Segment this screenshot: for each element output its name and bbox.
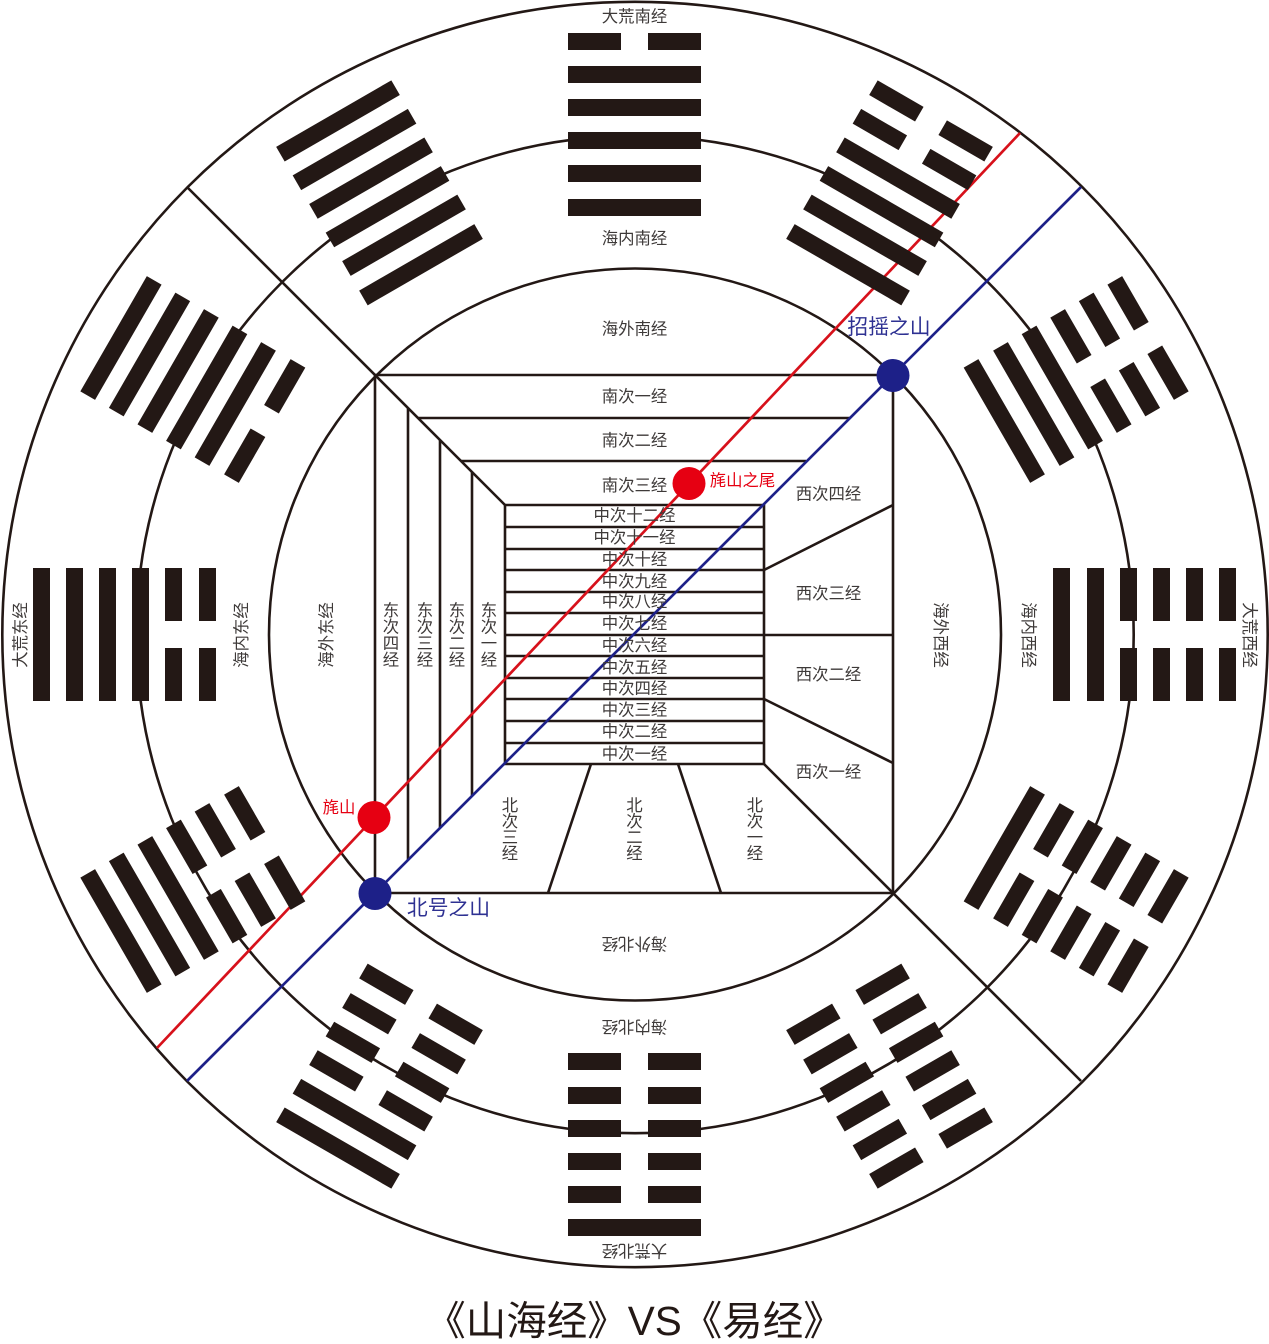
hexagram: 120 degrees xyxy=(964,786,1189,993)
north labels vertical 北次 xyxy=(502,797,763,863)
east labels rotated: 海内东经 xyxy=(233,602,251,668)
central labels 中次: 中次十二经 xyxy=(594,507,675,525)
central labels 中次: 中次七经 xyxy=(602,615,667,633)
hexagram: 150 degrees xyxy=(786,964,993,1189)
north labels upside down: 海内北经 xyxy=(602,1017,667,1035)
marker: 北号之山 xyxy=(358,877,490,920)
north labels upside down: 大荒北经 xyxy=(602,1241,667,1259)
east labels vertical 东次: 二 xyxy=(449,635,465,653)
west labels 西次: 西次一经 xyxy=(796,764,861,782)
east labels rotated: 海外东经 xyxy=(318,602,336,668)
east labels rotated xyxy=(12,602,336,668)
central labels 中次 xyxy=(594,507,675,764)
north labels vertical 北次: 经 xyxy=(747,845,763,863)
hexagram: left xyxy=(33,568,216,701)
hexagram: 60 degrees xyxy=(964,276,1189,483)
east labels vertical 东次 xyxy=(383,602,497,670)
hexagram: right xyxy=(1053,568,1236,701)
south labels: 海内南经 xyxy=(602,230,667,248)
north labels vertical 北次: 经 xyxy=(502,845,518,863)
north labels vertical 北次: 次 xyxy=(502,813,518,831)
central labels 中次: 中次九经 xyxy=(602,573,667,591)
east labels vertical 东次: 经 xyxy=(417,652,433,670)
north labels upside down: 海外北经 xyxy=(602,934,667,952)
blue line: 招摇之山 to 北号之山 alignment xyxy=(187,187,1081,1081)
hexagram: 210 degrees xyxy=(276,964,483,1189)
east labels vertical 东次: 次 xyxy=(481,618,497,636)
west labels 西次: 西次三经 xyxy=(796,585,861,603)
central labels 中次: 中次三经 xyxy=(602,702,667,720)
central labels 中次: 中次十一经 xyxy=(594,529,675,547)
east labels vertical 东次: 东 xyxy=(417,602,433,620)
marker: 招摇之山: 招摇之山 xyxy=(847,316,931,339)
east labels vertical 东次: 经 xyxy=(383,652,399,670)
north labels vertical 北次: 北 xyxy=(502,797,518,815)
north labels vertical 北次: 次 xyxy=(626,813,643,831)
east labels vertical 东次: 东 xyxy=(481,602,497,620)
east labels vertical 东次: 一 xyxy=(481,635,497,653)
central square diagram lines xyxy=(187,187,1081,1081)
north labels upside down xyxy=(602,934,667,1259)
south labels xyxy=(602,8,667,495)
hexagram: 330 degrees xyxy=(276,80,483,305)
south labels: 大荒南经 xyxy=(602,8,667,26)
marker: 旄山 xyxy=(323,799,390,834)
red line: 旄山 alignment xyxy=(157,133,1020,1048)
west labels rotated xyxy=(931,602,1258,668)
north labels vertical 北次: 北 xyxy=(747,797,763,815)
central labels 中次: 中次六经 xyxy=(602,637,667,655)
east labels vertical 东次: 经 xyxy=(481,652,497,670)
central labels 中次: 中次八经 xyxy=(602,593,667,611)
north labels vertical 北次: 三 xyxy=(502,829,518,847)
marker: 旄山: 旄山 xyxy=(323,799,355,817)
central labels 中次: 中次十经 xyxy=(602,551,667,569)
marker: 旄山之尾: 旄山之尾 xyxy=(710,472,775,490)
north labels vertical 北次: 一 xyxy=(747,829,763,847)
east labels vertical 东次: 经 xyxy=(449,652,465,670)
hexagram: 30 degrees xyxy=(786,80,993,305)
east labels vertical 东次: 次 xyxy=(383,618,399,636)
north labels vertical 北次: 经 xyxy=(626,845,643,863)
marker: 旄山之尾 xyxy=(672,467,775,500)
west labels 西次 xyxy=(796,486,861,782)
title: 《山海经》VS《易经》 xyxy=(425,1298,844,1344)
north labels vertical 北次: 二 xyxy=(626,829,643,847)
central labels 中次: 中次五经 xyxy=(602,659,667,677)
south labels: 海外南经 xyxy=(602,320,667,338)
hexagram: 300 degrees xyxy=(80,276,305,483)
east labels rotated: 大荒东经 xyxy=(12,602,30,668)
west labels rotated: 海外西经 xyxy=(931,602,949,668)
south labels: 南次三经 xyxy=(602,477,667,495)
west labels rotated: 海内西经 xyxy=(1019,602,1037,668)
south labels: 南次二经 xyxy=(602,432,667,450)
north labels vertical 北次: 北 xyxy=(626,797,643,815)
east labels vertical 东次: 三 xyxy=(417,635,433,653)
east labels vertical 东次: 东 xyxy=(449,602,465,620)
west labels 西次: 西次四经 xyxy=(796,486,861,504)
north labels vertical 北次: 次 xyxy=(747,813,763,831)
hexagram: top xyxy=(568,33,701,216)
west labels rotated: 大荒西经 xyxy=(1240,602,1258,668)
west labels 西次: 西次二经 xyxy=(796,666,861,684)
marker: 招摇之山 xyxy=(847,316,931,392)
east labels vertical 东次: 四 xyxy=(383,635,399,653)
hexagram: 240 degrees xyxy=(80,786,305,993)
east labels vertical 东次: 次 xyxy=(449,618,465,636)
south labels: 南次一经 xyxy=(602,388,667,406)
marker: 北号之山: 北号之山 xyxy=(407,897,490,920)
central labels 中次: 中次二经 xyxy=(602,723,667,741)
hexagram: bottom xyxy=(568,1053,701,1236)
central labels 中次: 中次四经 xyxy=(602,680,667,698)
east labels vertical 东次: 次 xyxy=(417,618,433,636)
central labels 中次: 中次一经 xyxy=(602,746,667,764)
east labels vertical 东次: 东 xyxy=(383,602,399,620)
